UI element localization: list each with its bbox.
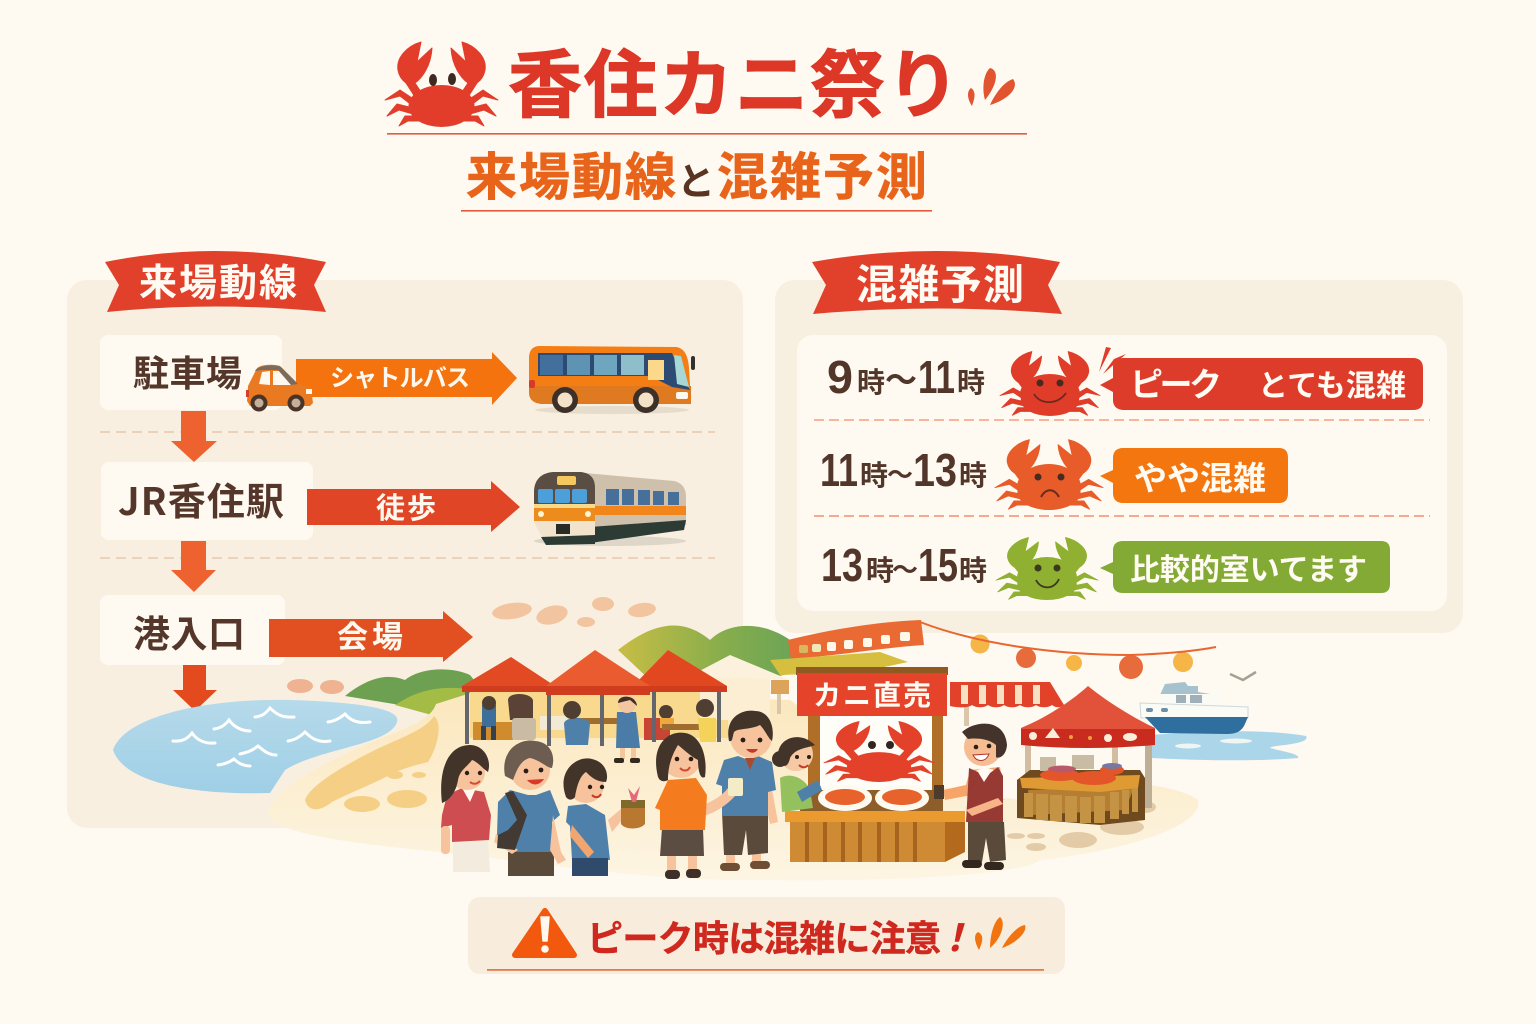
arrow: venue xyxy=(269,611,473,662)
subtitle: 来場動線 xyxy=(466,136,676,210)
ribbon heading: forecast xyxy=(812,251,1062,314)
title rule xyxy=(387,133,1027,135)
time label: 時 xyxy=(957,361,985,401)
arrow: down 3 xyxy=(173,665,217,711)
icon: title crab xyxy=(385,42,498,127)
title crab eyes xyxy=(429,73,456,86)
arrow: walk: 徒歩 xyxy=(376,485,436,527)
bubble text: とても混雑 xyxy=(1258,361,1406,405)
time label xyxy=(827,351,985,403)
icon: orange crab xyxy=(995,440,1103,510)
visitor: man with backpack xyxy=(494,741,566,876)
route step: parking xyxy=(100,335,282,410)
arrow: walk xyxy=(307,481,520,532)
bubble xyxy=(1100,358,1423,410)
sand xyxy=(268,690,1198,880)
sand darker patch xyxy=(305,716,439,809)
time label: 時 xyxy=(959,549,987,589)
dashed line xyxy=(100,557,715,559)
decorative pebbles xyxy=(287,597,657,694)
ribbon heading: route xyxy=(105,251,326,312)
time label xyxy=(820,444,987,496)
striped awning xyxy=(950,682,1064,726)
right sand patch pebbles xyxy=(1007,801,1156,851)
lantern string xyxy=(920,622,1216,679)
orange festival banner xyxy=(788,620,924,659)
subtitle rule xyxy=(461,210,932,212)
yellow hill behind stall xyxy=(770,652,908,675)
time label: 〜 xyxy=(892,550,918,587)
subtitle: 混雑予測 xyxy=(717,136,927,210)
market back area xyxy=(470,688,728,738)
icon: green crab xyxy=(996,537,1098,600)
icon: red crab xyxy=(1000,352,1100,416)
title text: 香住カニ祭り xyxy=(508,26,960,133)
time label: 13 xyxy=(913,444,957,496)
ribbon heading: route: 来場動線 xyxy=(139,252,297,307)
time label: 11 xyxy=(820,444,858,496)
route step: JR station xyxy=(101,462,313,540)
icon: warning triangle xyxy=(515,911,574,955)
icon: car xyxy=(246,365,313,412)
plates of crab xyxy=(818,785,929,811)
panel: route xyxy=(67,280,743,828)
icon: title splash xyxy=(968,68,1015,106)
time label: 9 xyxy=(827,351,853,403)
visitor: man with cup xyxy=(700,711,778,871)
visitor: boy with bag xyxy=(563,758,645,876)
dashed line xyxy=(100,431,715,433)
callout: peak warning xyxy=(468,897,1065,974)
crab face xyxy=(1017,557,1077,599)
bubble text: ピーク xyxy=(1130,358,1222,406)
icon: stall crab xyxy=(824,721,934,782)
time label xyxy=(821,539,987,591)
crab face xyxy=(1020,374,1080,414)
time label: 13 xyxy=(821,539,863,591)
row: 13-15 xyxy=(821,537,1390,600)
time label: 時 xyxy=(857,361,885,401)
callout rule xyxy=(487,969,1044,971)
hills xyxy=(618,626,830,680)
time label: 時 xyxy=(866,549,894,589)
small signpost xyxy=(771,680,789,714)
tents xyxy=(462,657,552,692)
tent poles xyxy=(465,690,721,746)
sea xyxy=(113,700,397,793)
bubble text xyxy=(1130,358,1406,406)
illustration: beach festival scene xyxy=(113,597,1307,880)
visitor: girl in green xyxy=(772,737,822,812)
subtitle: と xyxy=(677,151,715,206)
route step: parking: 駐車場 xyxy=(133,345,242,397)
time label: 時 xyxy=(959,454,987,494)
crab stall: カニ直売 xyxy=(813,674,931,714)
icon: train xyxy=(534,472,686,546)
background sea and ship xyxy=(1140,672,1307,760)
row: 9-11 xyxy=(827,347,1423,416)
gift bag xyxy=(621,786,645,828)
seafood tent xyxy=(1017,686,1155,825)
route step: port entrance: 港入口 xyxy=(133,604,245,658)
time label: 15 xyxy=(918,539,958,591)
panel: congestion forecast xyxy=(775,280,1463,633)
crab face xyxy=(1017,464,1081,510)
arrow: down 1 xyxy=(171,411,217,462)
time label: 11 xyxy=(918,351,955,403)
sea waves xyxy=(173,708,370,766)
row: 11-13 xyxy=(820,440,1288,510)
sand patches xyxy=(344,771,427,812)
forecast card xyxy=(797,335,1447,611)
bubble xyxy=(1100,448,1288,503)
bubble text: やや混雑 xyxy=(1134,452,1266,500)
visitor: woman in orange xyxy=(655,733,707,879)
warning text: ピーク時は混雑に注意 xyxy=(587,910,941,962)
arrow: shuttle bus xyxy=(296,352,517,405)
visitor: woman in red xyxy=(441,745,491,872)
bubble xyxy=(1100,541,1390,593)
arrow: shuttle bus: シャトルバス xyxy=(330,358,470,393)
crab stall xyxy=(785,667,965,862)
back tent furniture and visitors xyxy=(473,694,716,763)
arrow: venue: 会場 xyxy=(337,612,403,657)
time label: 時 xyxy=(860,454,888,494)
icon: warning splash xyxy=(975,917,1025,950)
crate of seafood xyxy=(1017,770,1145,825)
ribbon heading: forecast: 混雑予測 xyxy=(856,251,1024,311)
burst xyxy=(1099,347,1126,374)
route step: port entrance xyxy=(100,595,285,665)
subtitle xyxy=(466,136,927,210)
time label: 〜 xyxy=(885,355,917,401)
icon: bus xyxy=(529,346,695,414)
route step: JR station: JR香住駅 xyxy=(118,471,284,526)
arrow: down 2 xyxy=(171,541,216,592)
bubble text: 比較的室いてます xyxy=(1130,545,1367,589)
vendor xyxy=(934,724,1007,870)
warning text: ！ xyxy=(936,908,973,962)
time label: 〜 xyxy=(887,455,913,492)
title block xyxy=(385,26,1027,212)
